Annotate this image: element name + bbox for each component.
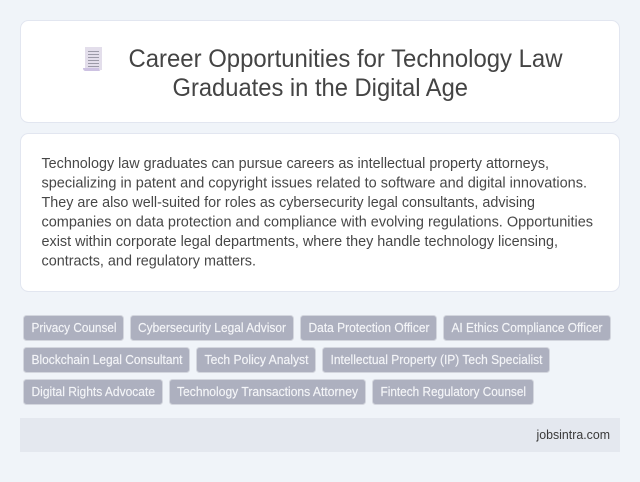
- tag: Technology Transactions Attorney: Technology Transactions Attorney: [177, 385, 359, 399]
- tag list: [24, 316, 610, 404]
- tag: Intellectual Property (IP) Tech Specialist: [322, 348, 550, 372]
- footer bar: [20, 418, 620, 452]
- tag: Blockchain Legal Consultant: Blockchain Legal Consultant: [32, 353, 183, 367]
- icon: document scroll: [83, 47, 102, 71]
- panel: description: [20, 134, 620, 292]
- description text: Technology law graduates can pursue careers as intellectual property attorneys,: [42, 155, 549, 172]
- tag: Cybersecurity Legal Advisor: Cybersecurity Legal Advisor: [138, 321, 286, 335]
- title: Graduates in the Digital Age: [172, 74, 468, 102]
- tag: Data Protection Officer: Data Protection Officer: [308, 321, 430, 335]
- tag: Privacy Counsel: [24, 316, 124, 340]
- tag: Digital Rights Advocate: [24, 380, 162, 404]
- tag: Tech Policy Analyst: Tech Policy Analyst: [204, 353, 309, 367]
- description text: They are also well-suited for roles as cybersecurity legal consultants, advising: [42, 194, 535, 211]
- description text: contracts, and regulatory matters.: [42, 252, 256, 270]
- description text: exist within corporate legal departments, where they handle technology licensing,: [42, 233, 558, 250]
- tag: Privacy Counsel: Privacy Counsel: [32, 321, 116, 335]
- footer source text: jobsintra.com: [536, 428, 610, 442]
- description text: companies on data protection and compliance with evolving regulations. Opportunities: [42, 214, 593, 230]
- title: Career Opportunities for Technology Law: [128, 45, 563, 73]
- tag: Fintech Regulatory Counsel: Fintech Regulatory Counsel: [380, 385, 526, 399]
- tag: AI Ethics Compliance Officer: [444, 316, 610, 340]
- tag: AI Ethics Compliance Officer: AI Ethics Compliance Officer: [452, 321, 602, 335]
- tag: Cybersecurity Legal Advisor: [130, 316, 294, 340]
- title: [128, 45, 563, 102]
- tag: Digital Rights Advocate: Digital Rights Advocate: [32, 385, 155, 399]
- tag: Tech Policy Analyst: [196, 348, 316, 372]
- tag: Data Protection Officer: [300, 316, 436, 340]
- panel: title card: [20, 20, 620, 122]
- tag: Technology Transactions Attorney: [170, 380, 366, 404]
- tag: Blockchain Legal Consultant: [24, 348, 190, 372]
- description text: specializing in patent and copyright issues related to software and digital innovations.: [42, 174, 587, 192]
- description text: [42, 155, 593, 270]
- tag: Fintech Regulatory Counsel: [372, 380, 534, 404]
- tag: Intellectual Property (IP) Tech Specialist: Intellectual Property (IP) Tech Specialist: [330, 353, 543, 367]
